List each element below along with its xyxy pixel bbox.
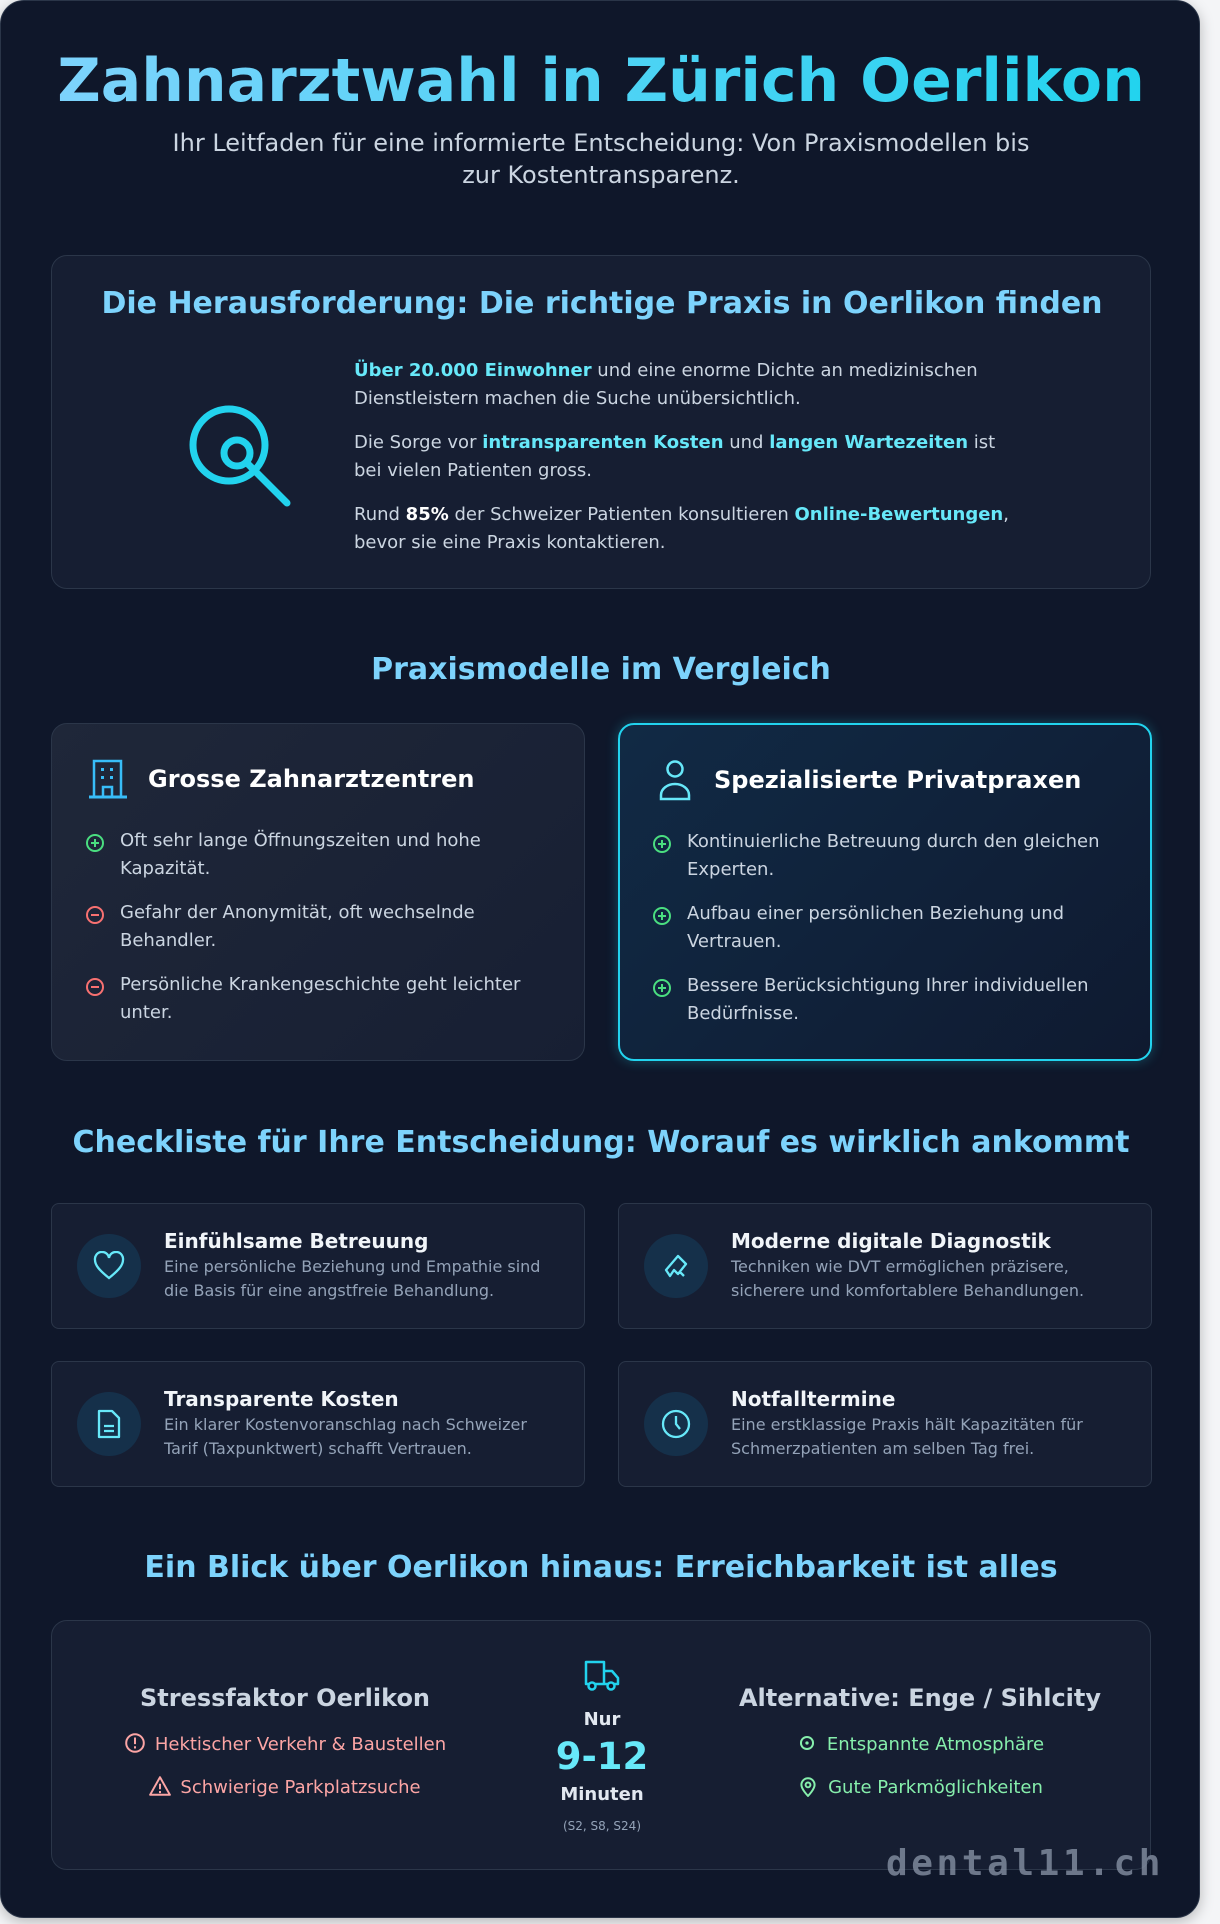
center: travel time: (S2, S8, S24) [563, 1819, 641, 1833]
check card: costs: Ein klarer Kostenvoranschlag nach Schweizer Tarif (Taxpunktwert) schafft Vertrauen. [164, 1415, 527, 1458]
list: pros and cons: Gefahr der Anonymität, oft wechselnde Behandler. [120, 902, 475, 951]
subtitle: Ihr Leitfaden für eine informierte Entscheidung: Von Praxismodellen bis zur Kostentransparenz. [173, 129, 1029, 189]
heading: erreichbarkeit: Ein Blick über Oerlikon hinaus: Erreichbarkeit ist alles [144, 1550, 1058, 1585]
column: stressfaktor: Schwierige Parkplatzsuche [180, 1777, 421, 1798]
column: alternative [739, 1684, 1101, 1798]
list: pros [653, 831, 1100, 1024]
check card: diagnostics [618, 1203, 1152, 1329]
text block: challenge facts: Über 20.000 Einwohner und eine enorme Dichte an medizinischen Dienstleistern machen die Suche unübersichtlich. [354, 360, 978, 409]
center: travel time: Minuten [560, 1784, 644, 1805]
column: stressfaktor [125, 1684, 446, 1798]
check card: diagnostics: Moderne digitale Diagnostik [731, 1229, 1051, 1253]
heading: checkliste: Checkliste für Ihre Entscheidung: Worauf es wirklich ankommt [72, 1125, 1129, 1160]
panel: challenge [51, 255, 1151, 589]
panel: grosse zahnarztzentren [51, 723, 585, 1061]
card title: Grosse Zahnarztzentren [148, 765, 474, 793]
list: pros: Bessere Berücksichtigung Ihrer individuellen Bedürfnisse. [687, 975, 1089, 1024]
column: stressfaktor: Stressfaktor Oerlikon [140, 1684, 430, 1712]
check card: empathy [51, 1203, 585, 1329]
list: pros: Kontinuierliche Betreuung durch den gleichen Experten. [687, 831, 1100, 880]
check card: emergency: Eine erstklassige Praxis hält Kapazitäten für Schmerzpatienten am selben Tag frei. [731, 1415, 1083, 1458]
icon: clock [644, 1392, 708, 1456]
icon: train [584, 1660, 620, 1691]
text block: challenge facts [354, 360, 1009, 553]
icon: magnifier [190, 406, 290, 506]
text block: challenge facts: Rund 85% der Schweizer Patienten konsultieren Online-Bewertungen, bevor sie eine Praxis kontaktieren. [354, 504, 1009, 553]
check card: empathy: Einfühlsame Betreuung [164, 1229, 428, 1253]
column: stressfaktor: Hektischer Verkehr & Baustellen [155, 1734, 446, 1755]
check card: costs [51, 1361, 585, 1487]
column: alternative: Alternative: Enge / Sihlcity [739, 1684, 1101, 1712]
column: alternative: Gute Parkmöglichkeiten [828, 1777, 1043, 1798]
panel: spezialisierte privatpraxen [618, 723, 1152, 1061]
text block: challenge facts: Die Sorge vor intransparenten Kosten und langen Wartezeiten ist bei vielen Patienten gross. [354, 432, 995, 481]
icon: building [89, 760, 127, 798]
check card: empathy: Eine persönliche Beziehung und Empathie sind die Basis für eine angstfreie Behandlung. [164, 1257, 540, 1300]
column: alternative: Entspannte Atmosphäre [827, 1734, 1044, 1755]
heading: praxismodelle: Praxismodelle im Vergleich [371, 652, 831, 687]
center: travel time: 9-12 [556, 1735, 648, 1778]
check card: emergency: Notfalltermine [731, 1387, 895, 1411]
icon: document [77, 1392, 141, 1456]
watermark: dental11.ch [886, 1843, 1164, 1884]
center: travel time: Nur [584, 1709, 620, 1730]
list: pros and cons: Persönliche Krankengeschichte geht leichter unter. [120, 974, 520, 1023]
check card: emergency [618, 1361, 1152, 1487]
icon: heart [77, 1234, 141, 1298]
heading: challenge: Die Herausforderung: Die richtige Praxis in Oerlikon finden [101, 286, 1103, 321]
panel: accessibility [51, 1620, 1151, 1870]
title: Zahnarztwahl in Zürich Oerlikon [57, 46, 1145, 116]
center: travel time [556, 1660, 648, 1833]
icon: diagnostic [644, 1234, 708, 1298]
check card: costs: Transparente Kosten [164, 1387, 399, 1411]
icon: person [660, 760, 690, 800]
card title: Spezialisierte Privatpraxen [714, 766, 1081, 794]
list: pros and cons: Oft sehr lange Öffnungszeiten und hohe Kapazität. [120, 830, 481, 879]
check card: diagnostics: Techniken wie DVT ermöglichen präzisere, sicherere und komfortablere Behandlungen. [731, 1257, 1084, 1300]
list: pros: Aufbau einer persönlichen Beziehung und Vertrauen. [687, 903, 1064, 952]
list: pros and cons [86, 830, 520, 1023]
